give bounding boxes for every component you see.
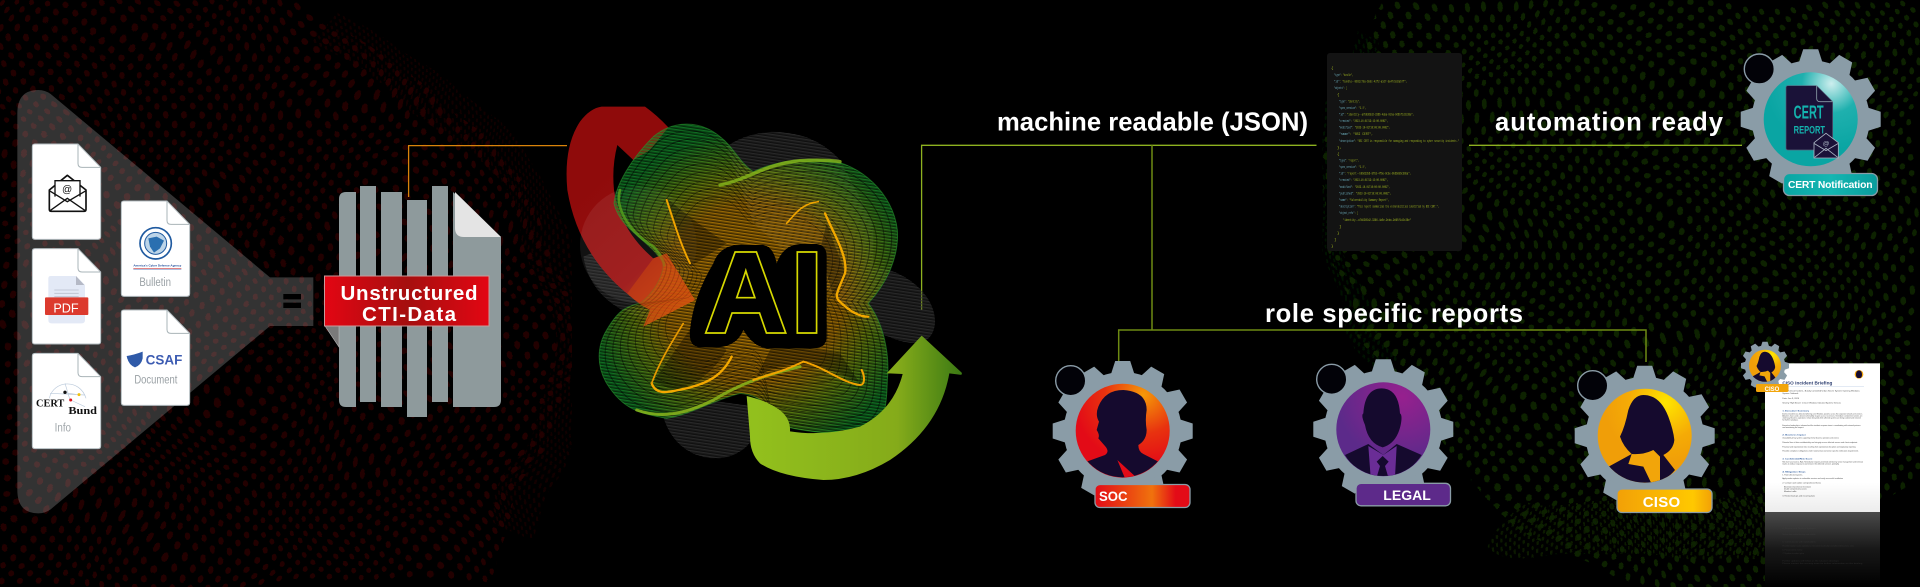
JSON code panel: }: [1337, 231, 1339, 236]
banner: [324, 276, 489, 326]
report body text: Unavailability of key systems supporting internal business operations and services: [1782, 437, 1839, 440]
report body text: A critical incident was detected affecting core Windows systems across the corporate network and services: [1782, 412, 1862, 415]
JSON code panel: ]: [1334, 238, 1336, 242]
report reflection: Restore from verified backups and validate: [1782, 533, 1816, 536]
JSON code panel: ]: [1339, 224, 1341, 230]
document: CERT-Bund info: Bund: [68, 405, 97, 417]
JSON code panel: "objects": [: [1334, 86, 1347, 91]
dark pockets inside the star: [653, 198, 860, 390]
label: CERT Notification: [1784, 174, 1878, 196]
gear: LEGAL: [1313, 359, 1453, 506]
AI text: AI: [705, 230, 823, 356]
banner text: CTI-Data: [362, 303, 457, 326]
grey background ribbons: [583, 132, 935, 458]
report body text: 4. Mitigation Steps: [1782, 470, 1807, 473]
disc: [1598, 389, 1692, 483]
JSON code panel: "id": "bundle--9931c7da-b5bc-42f2-a1d7-5e47c5d2ab7f",: [1334, 80, 1407, 84]
green arrow: [747, 336, 962, 480]
document: CSAF: Document: [134, 372, 178, 386]
green connector: role specific reports tree: [1119, 145, 1646, 362]
report divider: [1782, 385, 1864, 387]
report logo: [1855, 370, 1863, 379]
blob rim: [599, 124, 898, 433]
JSON code panel: "created": "2023-10-01T13:15:00.000Z",: [1339, 178, 1388, 183]
label: CERT Notification: CERT Notification: [1788, 180, 1872, 191]
document: PDF: [32, 249, 101, 344]
JSON code panel: {: [1337, 92, 1340, 98]
report reflection: [1765, 512, 1880, 587]
gear: CISO: [1575, 366, 1715, 512]
funnel of source documents: [17, 90, 313, 513]
page fold: [455, 192, 501, 237]
report body text: 3. Review backups and recovery plans: [1782, 495, 1815, 497]
JSON code panel: "description": "BSI CERT is responsible for managing and responding to cyber security incidents.": [1339, 139, 1459, 144]
report body text: Potential loss of data confidentiality and integrity across affected servers and client endpoints: [1782, 441, 1857, 444]
JSON code panel: }: [1331, 244, 1333, 249]
JSON code panel: "object_refs": [: [1339, 211, 1358, 216]
report body text: Financial and reputational risks resulting from operational disruption and regulatory reporting: [1782, 445, 1856, 448]
JSON code panel: [1327, 53, 1462, 251]
AI text: AI: [705, 230, 823, 356]
orange connector line: [409, 146, 567, 197]
AI backing shape: [690, 244, 827, 348]
report body text: 1. Patch affected systems: [1782, 473, 1802, 476]
equals sign: [283, 294, 301, 308]
document: CSAF: [121, 310, 190, 405]
CISO incident briefing report: [1765, 363, 1880, 512]
teal disc: [1764, 72, 1858, 166]
contour moire lines: [605, 131, 892, 427]
document: email: @: [62, 185, 72, 196]
report reflection: Provide regular status updates to executive leadership and affected business units: [1782, 545, 1854, 548]
gear: CERT Notification: [1741, 49, 1881, 196]
banner text: Unstructured: [340, 282, 478, 305]
document: email: [32, 144, 101, 239]
report body text: [1782, 389, 1864, 497]
label: CISO: [1617, 489, 1712, 512]
report body text: Severity: High Breach: Critical / Windows Indicated Systems Services: [1782, 401, 1841, 404]
document: PDF: PDF: [53, 301, 79, 315]
report body text: 2. Contain and isolate compromised hosts: [1782, 481, 1821, 484]
heading: automation ready: automation ready: [1495, 108, 1724, 136]
report reflection: 4. Review and Restore Systems: [1782, 527, 1816, 530]
report reflection: 5. Communicate with stakeholders: [1782, 540, 1816, 543]
report title: CISO Incident Briefing: [1782, 380, 1832, 385]
document: CISA bulletin: Bulletin: [139, 275, 171, 289]
report body text: Risk level assessed as High. Remediation requires prioritised attention by senior management and technical: [1782, 460, 1864, 463]
label: LEGAL: [1356, 483, 1450, 506]
JSON code panel: "id": "report--b9b62356-8fb3-4f6e-9cbe-9b6b8b6cb6ba",: [1339, 172, 1411, 176]
JSON code panel: {: [1331, 66, 1334, 71]
document: CISA bulletin: America's Cyber Defense Agency: [133, 264, 182, 268]
notch: [1578, 371, 1608, 401]
silhouette: [1609, 395, 1675, 484]
report body text: Possible compliance obligations under national law and sector specific notification requirements: [1782, 450, 1858, 453]
JSON code panel: "description": "This report summarizes the vulnerabilities identified by BSI CERT.",: [1339, 204, 1439, 210]
small CISO gear badge: [1741, 342, 1789, 393]
small disc: [1749, 350, 1781, 382]
report reflection: Please contact the security team for further information on this briefing: [1782, 562, 1862, 565]
icon: cert report with envelope: [1786, 86, 1838, 158]
report body text: teams to reduce exposure and restore the affected services promptly: [1782, 463, 1839, 466]
icon: cert report with envelope: CERT: [1794, 102, 1824, 123]
JSON code panel: "modified": "2023-10-01T10:00:00.000Z",: [1339, 185, 1390, 190]
notch: [1056, 366, 1086, 396]
document: CERT-Bund info: CERT: [36, 398, 65, 410]
shredded document: Unstructured CTI-Data: [324, 186, 501, 417]
report reflection: Further updates will follow as the situation develops: [1782, 559, 1839, 562]
icon: cert report with envelope: @: [1823, 140, 1830, 147]
small silhouette: [1753, 352, 1775, 382]
background: red dotted wave: [0, 0, 572, 587]
heading: role specific reports: role specific reports: [1265, 300, 1523, 328]
report reflection: 6. Post-incident review: [1782, 549, 1803, 552]
report body text: Disable compromised accounts: [1784, 488, 1807, 491]
disc: [1336, 382, 1430, 476]
document: CERT-Bund info: Info: [55, 421, 71, 435]
paper strips: [339, 186, 501, 417]
bright ribbon ridges: [619, 160, 868, 414]
disc: [1076, 384, 1170, 478]
label: LEGAL: LEGAL: [1383, 487, 1431, 503]
green connector: machine readable line: [922, 145, 1742, 310]
banner tail: [325, 326, 339, 347]
small label: CISO: [1765, 387, 1780, 393]
red arrow tip overlay: [627, 253, 695, 327]
JSON code panel: {: [1337, 152, 1340, 157]
background: green dotted wave: [1323, 0, 1920, 587]
JSON code panel: "spec_version": "2.1",: [1339, 106, 1366, 111]
green orange wave blob: [599, 124, 898, 433]
red arrow: [567, 107, 695, 327]
report body text: Date: Jun 9, 2024: [1782, 397, 1799, 400]
icon: cert report with envelope: REPORT: [1794, 125, 1825, 137]
JSON code panel: "type": "identity",: [1339, 100, 1360, 104]
report body text: underway. Business operations remain disrupted while affected systems are being isolated and restored: [1782, 416, 1861, 419]
report body text: and monitoring the impact.: [1782, 426, 1804, 429]
label: SOC: SOC: [1099, 489, 1128, 504]
document: CERT-Bund info: [32, 353, 101, 449]
report body text: From: Critical Incident - Bundy Controlled Urban Server System Opening Windows: [1782, 389, 1860, 392]
gear: SOC: [1053, 361, 1193, 508]
AI swirl with arrows: [567, 107, 962, 480]
light red overlay: [580, 187, 697, 303]
label: SOC: [1095, 484, 1190, 508]
report body text: 2. Business Impact: [1782, 434, 1806, 437]
report body text: System Outbreak: [1782, 392, 1798, 395]
JSON code panel: "type": "report",: [1339, 158, 1359, 164]
JSON code panel: "name": "Vulnerability Summary Report",: [1339, 198, 1389, 203]
report body text: for further analysis.: [1782, 419, 1799, 422]
report page: [1765, 363, 1880, 512]
JSON code panel: },: [1337, 146, 1342, 150]
report body text: Executive leadership is informed and the incident response team is coordinating with external partners: [1782, 424, 1861, 427]
silhouette: [1087, 390, 1158, 480]
notch: [1744, 54, 1774, 84]
silhouette: [1345, 388, 1422, 477]
report body text: Monitor traffic: [1784, 490, 1797, 493]
report body text: Apply vendor updates to vulnerable services and verify successful installation: [1782, 477, 1843, 480]
report body text: 1. Executive Summary: [1782, 410, 1810, 413]
JSON code panel: "spec_version": "2.1",: [1339, 165, 1366, 170]
JSON code panel: "published": "2023-10-01T10:00:00.000Z",: [1339, 192, 1391, 196]
JSON code panel: "created": "2023-10-01T13:15:00.000Z",: [1339, 119, 1388, 124]
report reflection: 7. Update incident plan: [1782, 552, 1804, 555]
report body text: 3. Confidential/Risk Score: [1782, 457, 1813, 460]
label: CISO: CISO: [1643, 494, 1681, 511]
JSON code panel: "name": "BSI CERT",: [1339, 132, 1373, 137]
JSON code panel: "identity--a7b9365d2-3366-4a5e-9cba-9d65f1d2c38e": [1343, 218, 1411, 223]
document: CSAF: CSAF: [146, 353, 182, 368]
JSON code panel: "modified": "2023-10-01T10:00:00.000Z",: [1339, 126, 1390, 130]
heading: machine readable (JSON): machine readable (JSON): [997, 108, 1308, 136]
document: CISA bulletin: [121, 201, 190, 296]
JSON code panel: "id": "identity--a7b9365d2-3366-4a5e-9cba-9d65f1d2c38e",: [1339, 112, 1414, 118]
notch: [1317, 364, 1347, 394]
funnel shape: [17, 90, 313, 513]
JSON code panel: "type": "bundle",: [1334, 73, 1353, 78]
report body text: Block lateral movement at the network: [1784, 486, 1811, 489]
report body text: Attackers have used a known vulnerability to gain access to services. Immediate containment actions are: [1782, 414, 1862, 417]
